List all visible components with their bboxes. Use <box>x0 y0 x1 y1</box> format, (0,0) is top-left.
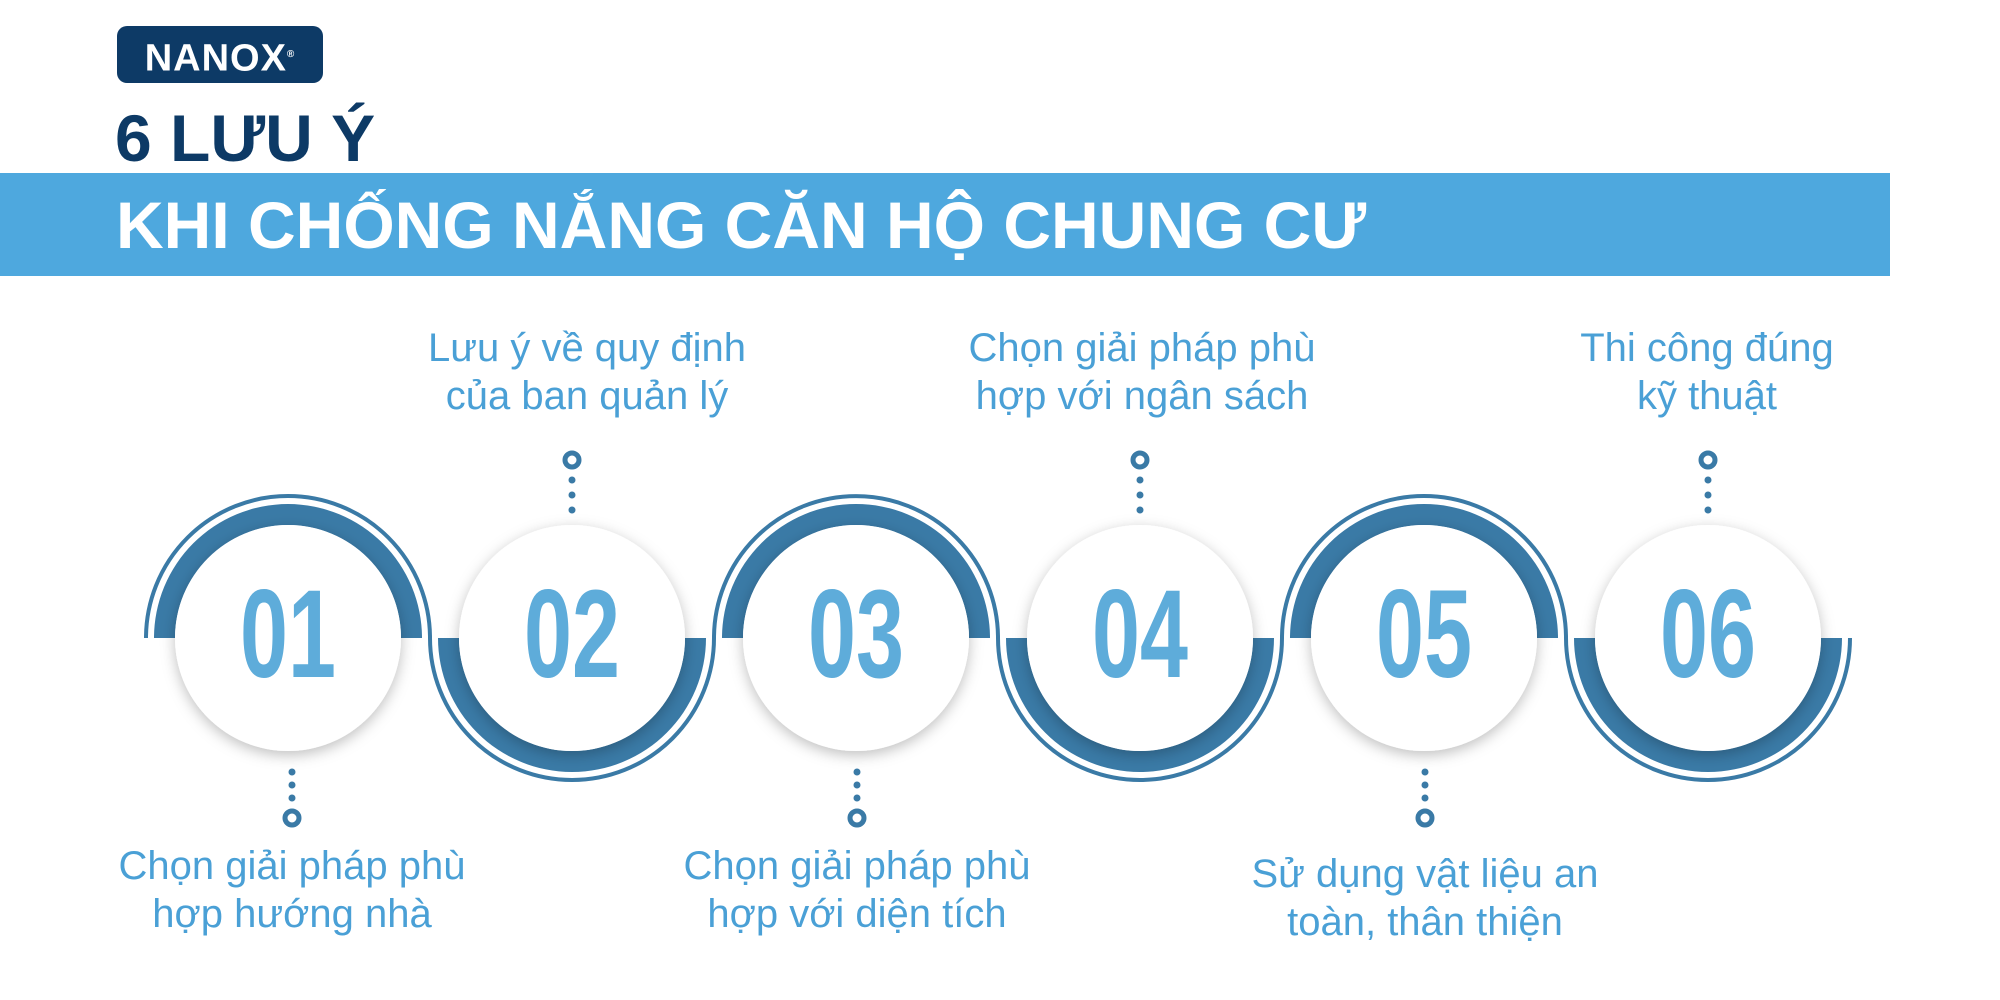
label 04: hợp với ngân sách <box>976 374 1308 418</box>
label 02: của ban quản lý <box>446 374 728 418</box>
label 06: Thi công đúng <box>1580 326 1834 370</box>
label 06 <box>1580 326 1834 418</box>
label 04 <box>969 326 1315 418</box>
label 03: Chọn giải pháp phù <box>684 844 1030 888</box>
circles with numbers <box>175 525 1821 751</box>
label 05: Sử dụng vật liệu an <box>1251 852 1598 896</box>
title band <box>0 173 1890 276</box>
label 01 <box>119 844 465 936</box>
circles with numbers: 02 <box>524 564 620 704</box>
circles with numbers: 05 <box>1376 564 1472 704</box>
label 06: kỹ thuật <box>1637 374 1777 418</box>
label 01: hợp hướng nhà <box>152 892 432 936</box>
wave line <box>146 496 1850 780</box>
circles with numbers: 06 <box>1660 564 1756 704</box>
circles with numbers: 01 <box>240 564 336 704</box>
circles with numbers: 03 <box>808 564 904 704</box>
label 04: Chọn giải pháp phù <box>969 326 1315 370</box>
pins <box>285 453 1715 825</box>
heading: 6 LƯU Ý: 6 LƯU Ý <box>115 101 375 175</box>
logo <box>117 26 323 83</box>
label 03 <box>684 844 1030 936</box>
label 05: toàn, thân thiện <box>1287 900 1563 944</box>
label 02 <box>428 326 746 418</box>
bands <box>154 504 1842 772</box>
label 05 <box>1251 852 1598 944</box>
circles with numbers: 04 <box>1092 564 1188 704</box>
label 02: Lưu ý về quy định <box>428 326 746 370</box>
label 01: Chọn giải pháp phù <box>119 844 465 888</box>
logo: NANOX® <box>145 38 295 80</box>
title band: KHI CHỐNG NẮNG CĂN HỘ CHUNG CƯ <box>116 188 1366 262</box>
label 03: hợp với diện tích <box>707 892 1007 936</box>
